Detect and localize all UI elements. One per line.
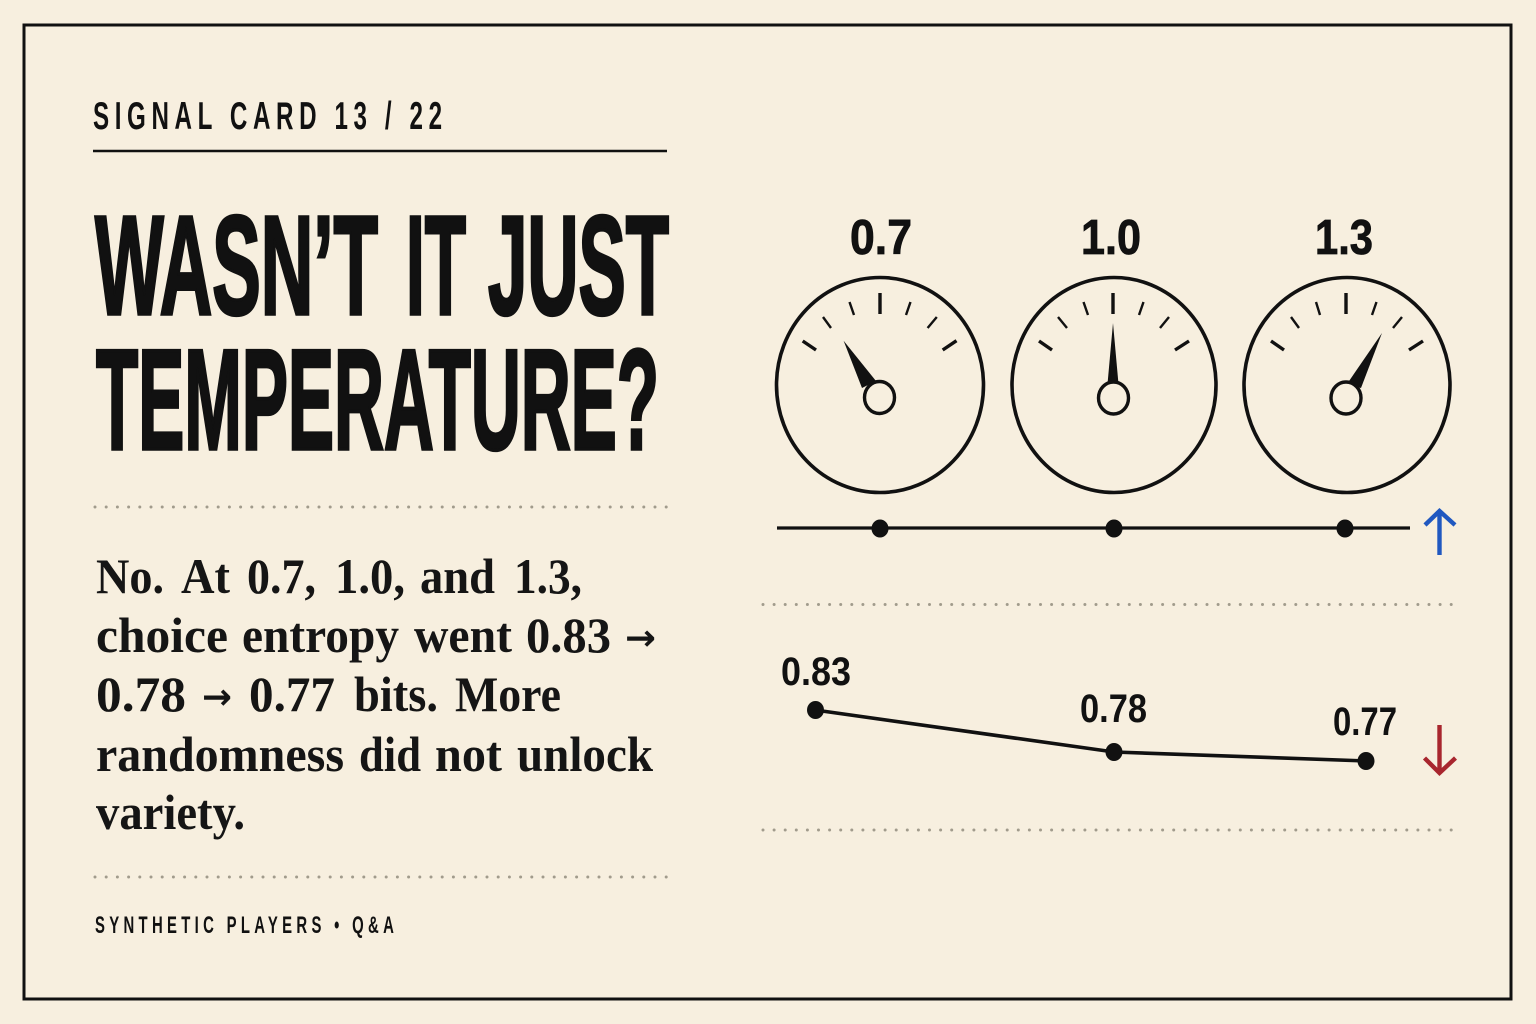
body text: 0.78 (96, 666, 186, 722)
body text: 0.83 (526, 607, 611, 663)
body text: and (420, 548, 495, 604)
body text: not (435, 726, 502, 782)
body text: 1.3, (514, 548, 582, 604)
icon: blue up arrow (1425, 511, 1455, 555)
title: IT (406, 186, 466, 344)
body text: At (181, 548, 230, 604)
title: WASN’T (95, 186, 378, 344)
footer label: SYNTHETIC PLAYERS • Q&A (95, 913, 394, 939)
gauge: temperature 0.7 (776, 211, 984, 492)
line chart: choice entropy: 0.77 (1333, 700, 1397, 744)
body text: More (455, 666, 561, 722)
body text: did (359, 726, 421, 782)
body text: 0.7, (247, 548, 316, 604)
body text: variety. (96, 784, 245, 840)
body text: 1.0, (335, 548, 405, 604)
temperature axis with markers (777, 520, 1410, 538)
eyebrow: signal card number: SIGNAL CARD 13 / 22 (93, 94, 442, 137)
line chart: choice entropy: 0.78 (1080, 687, 1147, 731)
body text: bits. (354, 666, 438, 722)
title (95, 186, 669, 480)
icon: red down arrow (1424, 725, 1456, 773)
body text: → (625, 618, 656, 659)
gauge: temperature 1.0 (1012, 211, 1216, 492)
panel: left text column (93, 94, 669, 939)
title: JUST (488, 186, 669, 344)
body text: No. (96, 548, 164, 604)
body text (96, 548, 656, 840)
panel: temperature gauges (776, 211, 1455, 555)
body text: unlock (517, 726, 653, 782)
body text: choice (96, 607, 228, 663)
body text: entropy (242, 607, 399, 663)
gauge: temperature 0.7: 0.7 (850, 211, 912, 265)
line chart: choice entropy (781, 650, 1397, 770)
text: TEMPERATURE? (96, 321, 659, 480)
gauge: temperature 1.0: 1.0 (1081, 211, 1141, 265)
line chart: choice entropy: 0.83 (781, 650, 851, 694)
body text: randomness (96, 726, 344, 782)
body text: → (202, 677, 232, 718)
gauge: temperature 1.3: 1.3 (1315, 211, 1373, 265)
gauge: temperature 1.3 (1244, 211, 1450, 492)
body text: 0.77 (249, 666, 335, 722)
body text: went (414, 607, 512, 663)
